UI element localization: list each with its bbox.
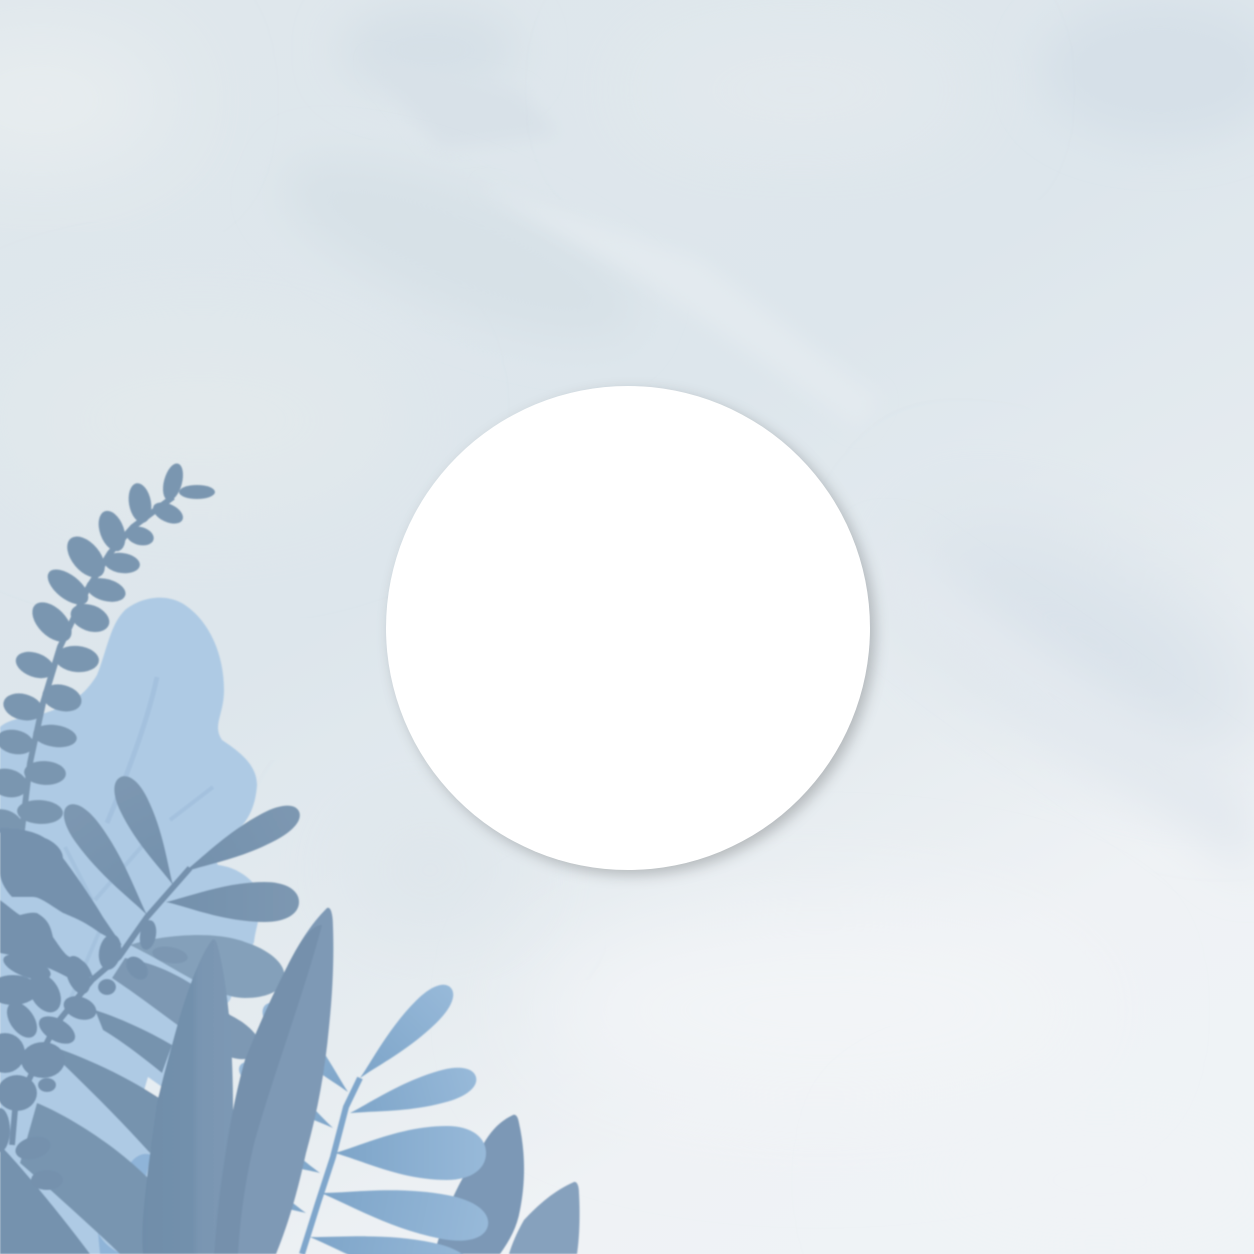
spear leaf right xyxy=(214,908,333,1254)
lower right dark leaves xyxy=(434,1115,580,1254)
white circle with shadow xyxy=(386,386,875,875)
dark frond leaves xyxy=(0,771,306,1254)
bright blue fern xyxy=(224,977,492,1254)
foliage group xyxy=(0,461,580,1254)
light blue background blob xyxy=(0,598,260,1254)
fern sprig upper left xyxy=(0,461,215,880)
cluster of small leaves at left xyxy=(0,919,189,1190)
spear leaf left xyxy=(142,939,233,1254)
white gap spot xyxy=(143,1077,162,1100)
